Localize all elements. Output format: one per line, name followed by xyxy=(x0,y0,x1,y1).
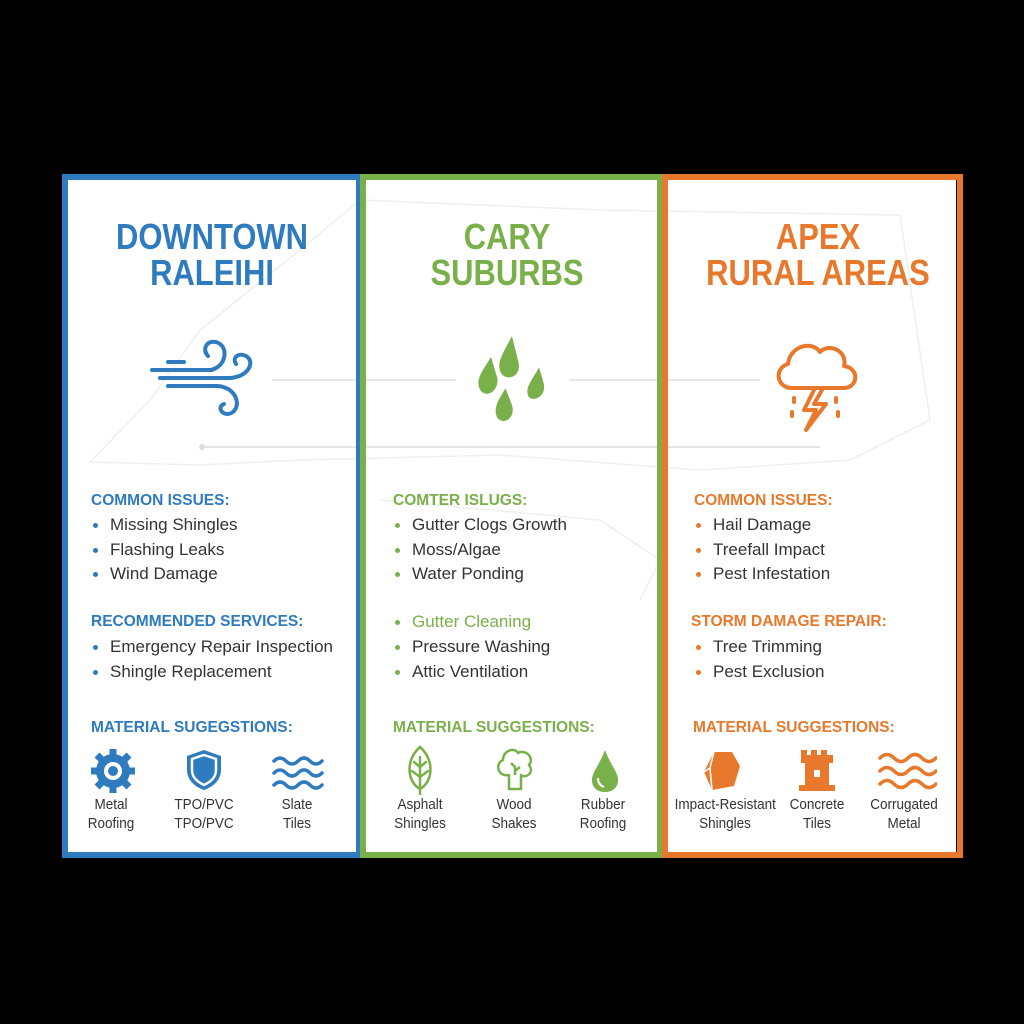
labels blue xyxy=(88,796,312,832)
text: Roofing xyxy=(580,815,626,832)
text: Slate xyxy=(282,796,312,813)
title: downtown xyxy=(116,216,308,293)
text: Corrugated xyxy=(870,796,938,813)
text: cary lists xyxy=(393,492,595,736)
icon: hex stone xyxy=(704,752,740,790)
panel: apex rural xyxy=(662,174,963,858)
title: cary xyxy=(430,216,584,293)
text: Tiles xyxy=(283,815,311,832)
text: Hail Damage xyxy=(713,515,811,534)
text: TPO/PVC xyxy=(174,796,234,813)
text: Tree Trimming xyxy=(713,637,822,656)
text: Moss/Algae xyxy=(412,540,501,559)
text: Missing Shingles xyxy=(110,515,238,534)
text: Gutter Clogs Growth xyxy=(412,515,567,534)
icon: gear xyxy=(91,749,135,793)
icon: leaf xyxy=(408,746,432,795)
title: downtown: RALEIHI xyxy=(150,252,274,293)
text: Wind Damage xyxy=(110,564,218,583)
text: Gutter Cleaning xyxy=(412,612,531,631)
icon: rain drops xyxy=(478,336,544,421)
title: apex xyxy=(706,216,930,293)
text: downtown lists xyxy=(91,492,333,736)
title: apex: APEX xyxy=(776,216,860,257)
text: Asphalt xyxy=(397,796,443,813)
icon: waves orange xyxy=(878,752,937,790)
labels orange xyxy=(675,796,938,832)
title: cary: CARY xyxy=(464,216,550,257)
icon: shield xyxy=(187,750,221,790)
text: Rubber xyxy=(581,796,625,813)
text: Shakes xyxy=(491,815,537,832)
icon: waves blue xyxy=(272,756,324,790)
text: Shingles xyxy=(394,815,446,832)
text: RECOMMENDED SERVICES: xyxy=(91,613,303,630)
text: Water Ponding xyxy=(412,564,524,583)
text: Pest Infestation xyxy=(713,564,830,583)
text: Shingle Replacement xyxy=(110,662,272,681)
title: apex: RURAL AREAS xyxy=(706,252,930,293)
text: Attic Ventilation xyxy=(412,662,528,681)
icon: storm cloud xyxy=(776,344,858,432)
panel: cary suburbs xyxy=(360,174,663,858)
title: cary: SUBURBS xyxy=(430,252,584,293)
title: downtown: DOWNTOWN xyxy=(116,216,308,257)
text: Pest Exclusion xyxy=(713,662,824,681)
text: COMTER ISLUGS: xyxy=(393,492,527,509)
text: Roofing xyxy=(88,815,134,832)
text: Wood xyxy=(496,796,532,813)
text: STORM DAMAGE REPAIR: xyxy=(691,613,887,630)
text: Metal xyxy=(94,796,128,813)
text: Pressure Washing xyxy=(412,637,550,656)
text: COMMON ISSUES: xyxy=(694,492,833,509)
icon: wind xyxy=(150,340,252,416)
text: COMMON ISSUES: xyxy=(91,492,230,509)
text: Metal xyxy=(887,815,921,832)
text: TPO/PVC xyxy=(174,815,234,832)
text: Impact-Resistant xyxy=(675,796,776,813)
icon: tree xyxy=(496,748,532,790)
text: apex lists xyxy=(691,492,895,736)
text: Shingles xyxy=(699,815,751,832)
text: MATERIAL SUGGESTIONS: xyxy=(693,719,895,736)
text: MATERIAL SUGGESTIONS: xyxy=(393,719,595,736)
icon: tower xyxy=(799,750,835,791)
text: Concrete xyxy=(790,796,844,813)
labels green xyxy=(394,796,626,832)
text: Tiles xyxy=(803,815,831,832)
icon: drop green xyxy=(592,750,618,792)
panel: downtown raleigh xyxy=(62,174,362,858)
text: MATERIAL SUGEGSTIONS: xyxy=(91,719,293,736)
text: Flashing Leaks xyxy=(110,540,224,559)
text: Treefall Impact xyxy=(713,540,825,559)
text: Emergency Repair Inspection xyxy=(110,637,333,656)
